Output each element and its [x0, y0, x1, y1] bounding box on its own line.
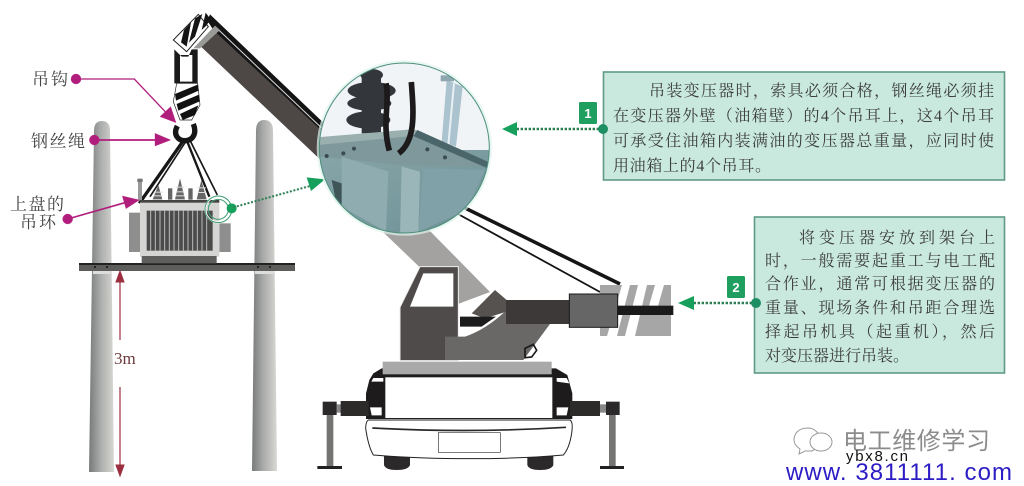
right outrigger [570, 401, 624, 469]
wire rope sling detail [386, 82, 413, 153]
badge 2: 2 [732, 280, 740, 295]
panel 2 text line 6: 对变压器进行吊装。 [765, 347, 909, 365]
turntable body [445, 312, 550, 360]
insulator [346, 69, 396, 133]
conservator pipe [441, 75, 463, 147]
panel 2 text line 4: 重量、现场条件和吊距合理选 [765, 299, 995, 317]
label: lifting ring line two: 吊环 [20, 213, 57, 232]
tank lid plate [320, 134, 446, 164]
pink pointer: lifting ring [63, 196, 139, 224]
truck rear body [366, 362, 572, 419]
crane truck [317, 267, 673, 470]
tail hatch block [600, 285, 671, 336]
boom hinge [472, 290, 507, 318]
crane lower boom section [383, 228, 490, 304]
panel 1 text line 2: 在变压器外壁（油箱壁）的4个吊耳上，这4个吊耳 [613, 107, 994, 125]
black rod [617, 306, 673, 315]
platform beam [79, 263, 295, 274]
counterweight box [569, 294, 618, 327]
text panel 2 [754, 217, 1004, 373]
licence plate [438, 432, 500, 453]
black strut [460, 317, 496, 327]
hook block [173, 49, 200, 120]
landing gear jack small part [525, 344, 537, 358]
watermark account name: 电工维修学习 [843, 428, 990, 455]
tank panels [342, 157, 388, 232]
detail callout ring and dotted arrow [205, 177, 325, 223]
badge 1 [579, 102, 597, 124]
panel 1 text line 1: 吊装变压器时，索具必须合格，钢丝绳必须挂 [649, 81, 994, 100]
left utility pole [89, 121, 114, 472]
tank wall [320, 150, 489, 232]
magnified detail circle [313, 60, 493, 237]
height dimension arrow [116, 271, 124, 476]
pink pointer: hook [71, 74, 176, 123]
crane hoist cables [458, 208, 620, 292]
panel 2 text line 1: 将变压器安放到架台上 [799, 229, 995, 247]
dotted arrow from panel 2 to crane [678, 296, 761, 310]
tyres [384, 455, 553, 470]
label: lifting ring line one: 上盘的 [10, 195, 64, 214]
bumper [366, 420, 572, 459]
text panel 1 [604, 72, 1004, 180]
badge 1: 1 [584, 106, 592, 121]
panel 1 text line 4: 用油箱上的4个吊耳。 [613, 157, 771, 175]
watermark large url: www. 3811111. com [785, 459, 1012, 486]
boom upper section [193, 14, 323, 159]
badge 2 [727, 276, 745, 298]
hook [176, 124, 195, 141]
label: hook: 吊钩 [32, 70, 68, 89]
cab [400, 267, 458, 361]
panel 2 text line 5: 择起吊机具（起重机），然后 [765, 323, 995, 341]
bumper stripe [372, 427, 566, 431]
height label: 3m [114, 349, 136, 368]
dotted arrow from panel 1 to detail [502, 122, 608, 136]
panel 1 text line 3: 可承受住油箱内装满油的变压器总重量，应同时使 [613, 132, 994, 150]
label: wire rope: 钢丝绳 [31, 132, 85, 151]
left outrigger [317, 401, 369, 469]
lifting slings [139, 142, 217, 203]
bolts [325, 147, 447, 159]
pink pointer: wire rope [89, 133, 171, 146]
panel 2 text line 2: 时，一般需要起重工与电工配 [765, 252, 995, 270]
watermark small url: ybx8.cn [846, 448, 908, 465]
right utility pole [252, 120, 277, 471]
icon: wechat watermark [794, 428, 832, 454]
transformer [129, 178, 231, 263]
hydraulic arm [506, 300, 570, 324]
panel 2 text line 3: 合作业，通常可根据变压器的 [765, 275, 995, 293]
crane boom tip, hook and transformer [63, 13, 325, 263]
boom head pulley [173, 13, 211, 52]
